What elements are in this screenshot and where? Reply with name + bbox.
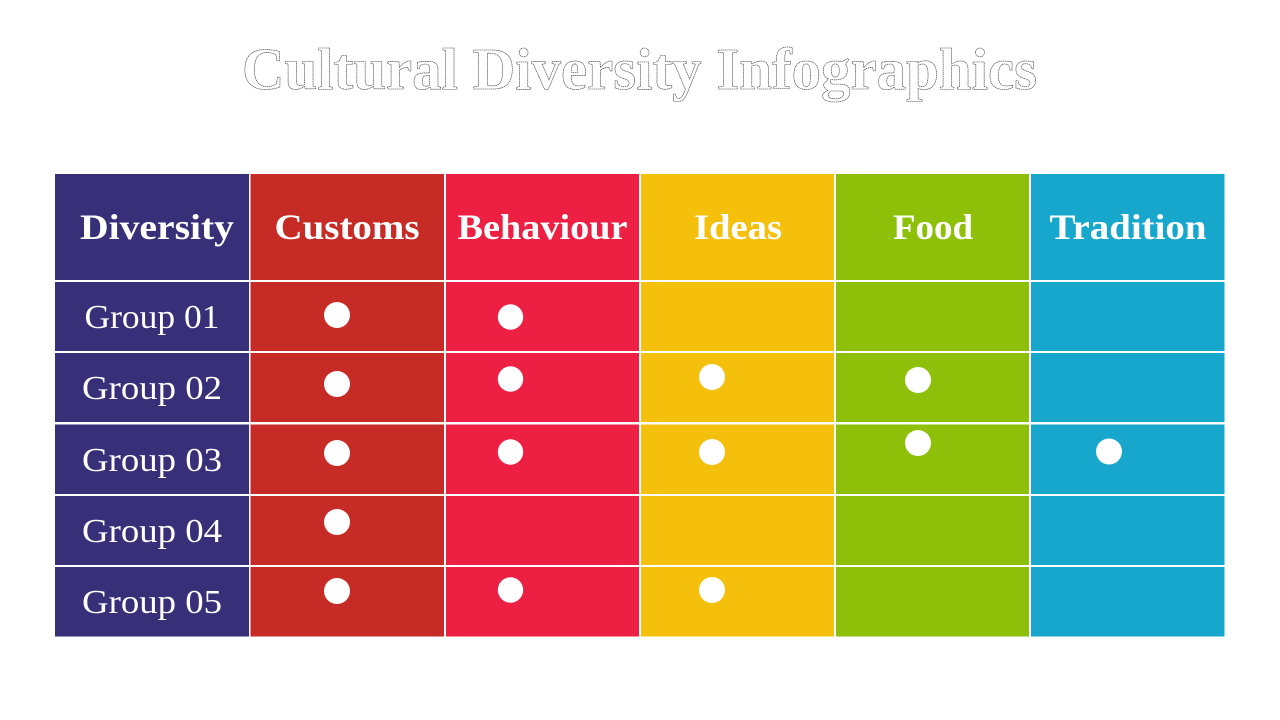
- column: behaviour: [446, 174, 639, 636]
- column: customs: Customs: [274, 207, 420, 247]
- column: tradition: [1031, 174, 1224, 636]
- column: customs: [250, 174, 444, 636]
- column: diversity groups: Group 04: [82, 513, 222, 550]
- column: tradition: Tradition: [1050, 207, 1206, 247]
- column: food: [836, 174, 1029, 636]
- column: ideas: Ideas: [694, 207, 782, 247]
- table: diversity matrix: [55, 174, 1224, 636]
- column: diversity groups: Group 01: [84, 299, 220, 336]
- column: diversity groups: Group 05: [82, 584, 222, 621]
- column: behaviour: Behaviour: [458, 207, 628, 247]
- column: diversity groups: [55, 174, 249, 636]
- column: diversity groups: Group 03: [82, 442, 222, 479]
- column: diversity groups: Diversity: [80, 207, 234, 247]
- column: food: Food: [893, 207, 973, 247]
- column: diversity groups: Group 02: [82, 370, 222, 407]
- title: Cultural Diversity Infographics: [242, 36, 1037, 102]
- column: ideas: [641, 174, 834, 636]
